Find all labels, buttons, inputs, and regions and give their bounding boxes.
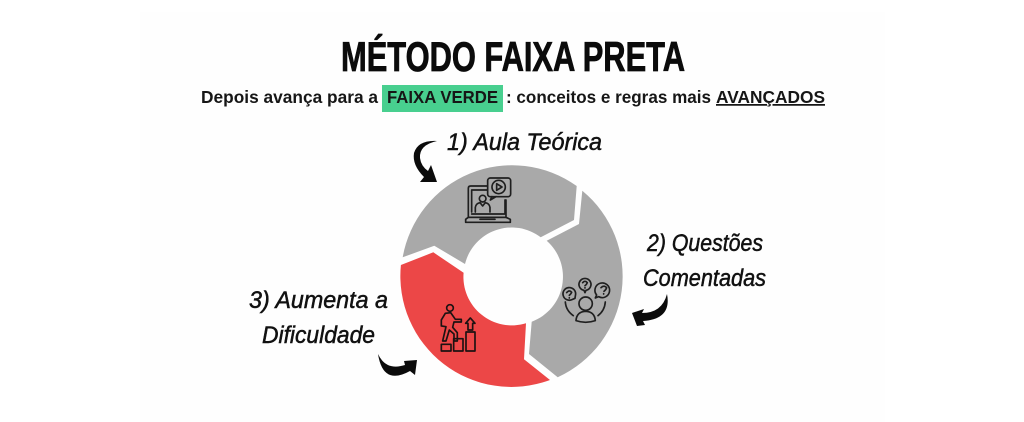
arrow 3 bbox=[378, 354, 417, 376]
label 3 line 1: 3) Aumenta a bbox=[249, 287, 388, 314]
arrow 2 bbox=[632, 294, 668, 326]
label 2 line 1: 2) Questões bbox=[646, 230, 763, 257]
subtitle continuation: : conceitos e regras mais bbox=[506, 87, 711, 107]
segment 2: questões comentadas bbox=[529, 191, 623, 377]
label 3 line 2: Dificuldade bbox=[262, 322, 375, 349]
segment 1: aula teórica bbox=[403, 165, 577, 264]
label 2 bbox=[643, 230, 766, 292]
subtitle bbox=[201, 85, 825, 112]
icon: person climbing steps bbox=[441, 305, 475, 351]
title: MÉTODO FAIXA PRETA bbox=[341, 33, 685, 80]
subtitle lead text: Depois avança para a bbox=[201, 87, 378, 107]
icon: people with questions bbox=[563, 278, 610, 322]
label 1: 1) Aula Teórica bbox=[447, 129, 602, 156]
segment 3: aumenta a dificuldade bbox=[400, 252, 550, 387]
label 2 line 2: Comentadas bbox=[643, 265, 766, 292]
label 3 bbox=[249, 287, 388, 349]
underlined word: AVANÇADOS bbox=[716, 87, 825, 107]
arrow 1 bbox=[414, 141, 437, 182]
green highlight: faixa verde bbox=[382, 85, 503, 112]
cycle ring bbox=[400, 165, 623, 387]
icon: video lesson laptop bbox=[466, 178, 511, 222]
highlighted text: FAIXA VERDE bbox=[387, 87, 498, 107]
